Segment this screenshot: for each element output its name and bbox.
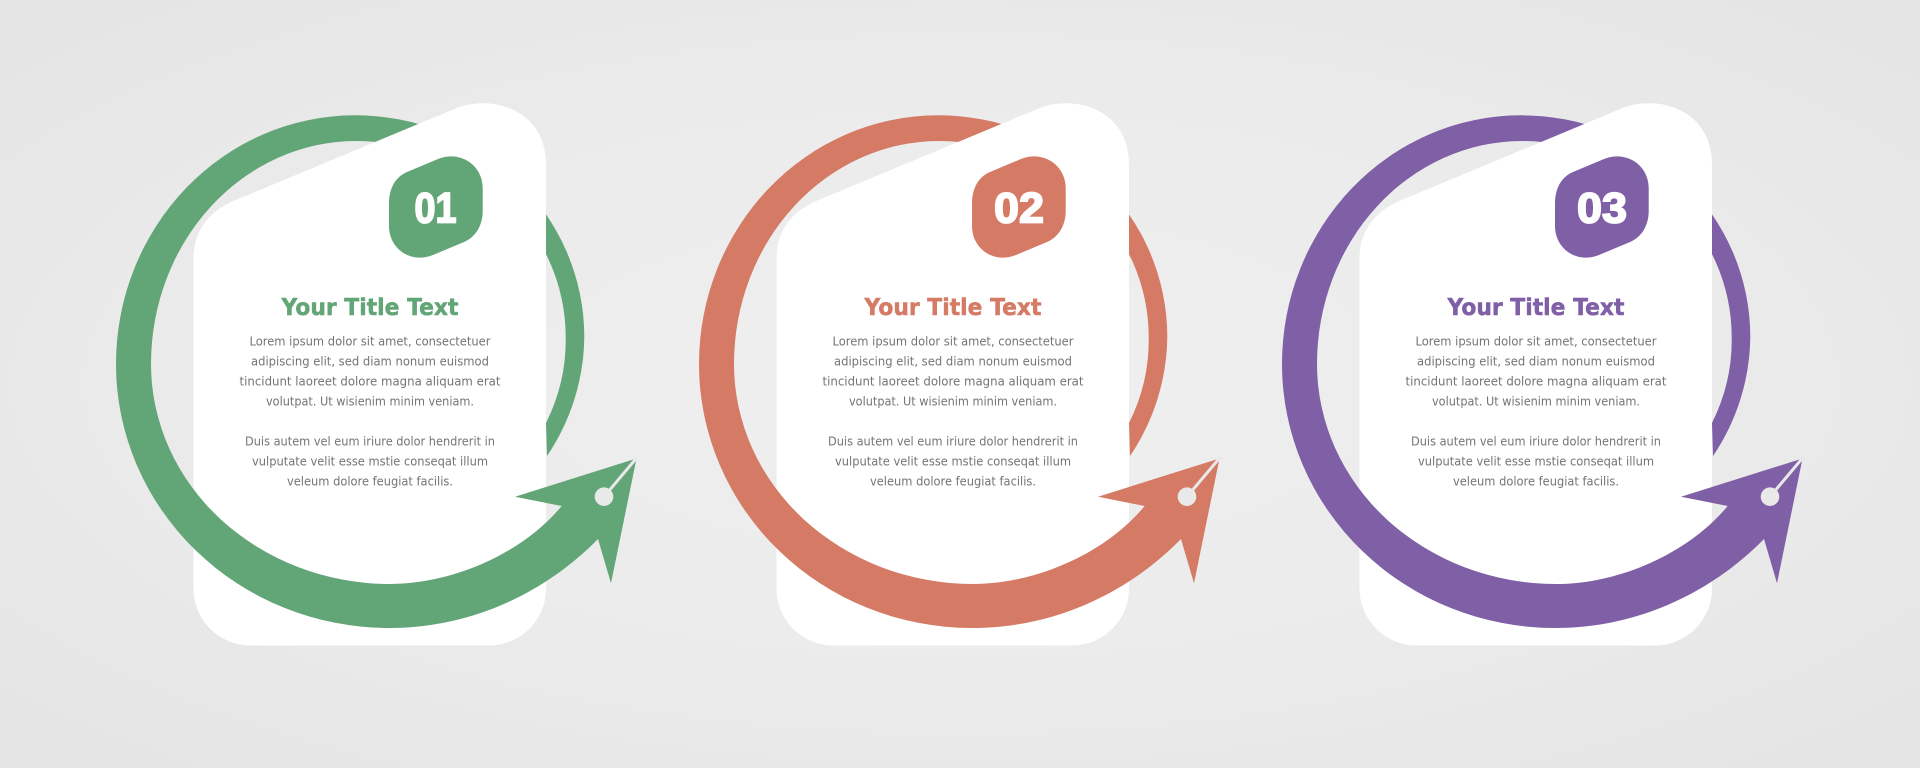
number: 02: [994, 184, 1044, 232]
body text: volutpat. Ut wisienim minim veniam.: [1432, 394, 1640, 408]
ring: upper arc behind card: [1282, 115, 1750, 456]
arrow dot and line: [1761, 458, 1803, 506]
body text: volutpat. Ut wisienim minim veniam.: [266, 394, 474, 408]
body text: Lorem ipsum dolor sit amet, consectetuer: [832, 334, 1074, 348]
number: 03: [1577, 184, 1627, 232]
panel: step 01: [116, 103, 637, 645]
panel: step 02: [699, 103, 1220, 645]
body text: adipiscing elit, sed diam nonum euismod: [1417, 354, 1655, 368]
arrow: lower arc and head: [116, 364, 636, 628]
body text: vulputate velit esse mstie conseqat illum: [252, 454, 488, 468]
arrow dot and line: [595, 458, 637, 506]
arrow: lower arc and head: [699, 364, 1220, 628]
card: [776, 103, 1129, 645]
card: [1359, 103, 1712, 645]
number badge: [972, 156, 1066, 258]
card: [193, 103, 546, 645]
title: Your Title Text: [1447, 293, 1624, 321]
number: 01: [414, 184, 456, 232]
body text: tincidunt laoreet dolore magna aliquam erat: [240, 374, 501, 388]
body text: Duis autem vel eum iriure dolor hendrerit in: [245, 434, 495, 448]
ring: upper arc behind card: [116, 115, 584, 456]
body text: [1406, 334, 1667, 488]
body text: Lorem ipsum dolor sit amet, consectetuer: [250, 334, 491, 348]
body text: Duis autem vel eum iriure dolor hendrerit in: [1411, 434, 1661, 448]
title: Your Title Text: [864, 293, 1042, 321]
body text: adipiscing elit, sed diam nonum euismod: [834, 354, 1072, 368]
body text: [240, 334, 501, 488]
arrow: lower arc and head: [1282, 364, 1802, 628]
title: Your Title Text: [281, 293, 458, 321]
body text: Lorem ipsum dolor sit amet, consectetuer: [1416, 334, 1657, 348]
body text: [822, 334, 1084, 488]
body text: veleum dolore feugiat facilis.: [287, 474, 453, 488]
panel: step 03: [1282, 103, 1803, 645]
body text: tincidunt laoreet dolore magna aliquam erat: [1406, 374, 1667, 388]
body text: tincidunt laoreet dolore magna aliquam erat: [822, 374, 1084, 388]
body text: Duis autem vel eum iriure dolor hendrerit in: [828, 434, 1078, 448]
body text: vulputate velit esse mstie conseqat illum: [1418, 454, 1654, 468]
number badge: [1555, 156, 1649, 258]
body text: adipiscing elit, sed diam nonum euismod: [251, 354, 489, 368]
body text: veleum dolore feugiat facilis.: [870, 474, 1036, 488]
body text: vulputate velit esse mstie conseqat illum: [835, 454, 1071, 468]
body text: veleum dolore feugiat facilis.: [1453, 474, 1619, 488]
arrow dot and line: [1178, 458, 1220, 506]
body text: volutpat. Ut wisienim minim veniam.: [849, 394, 1057, 408]
ring: upper arc behind card: [699, 115, 1167, 456]
number badge: [389, 156, 483, 258]
